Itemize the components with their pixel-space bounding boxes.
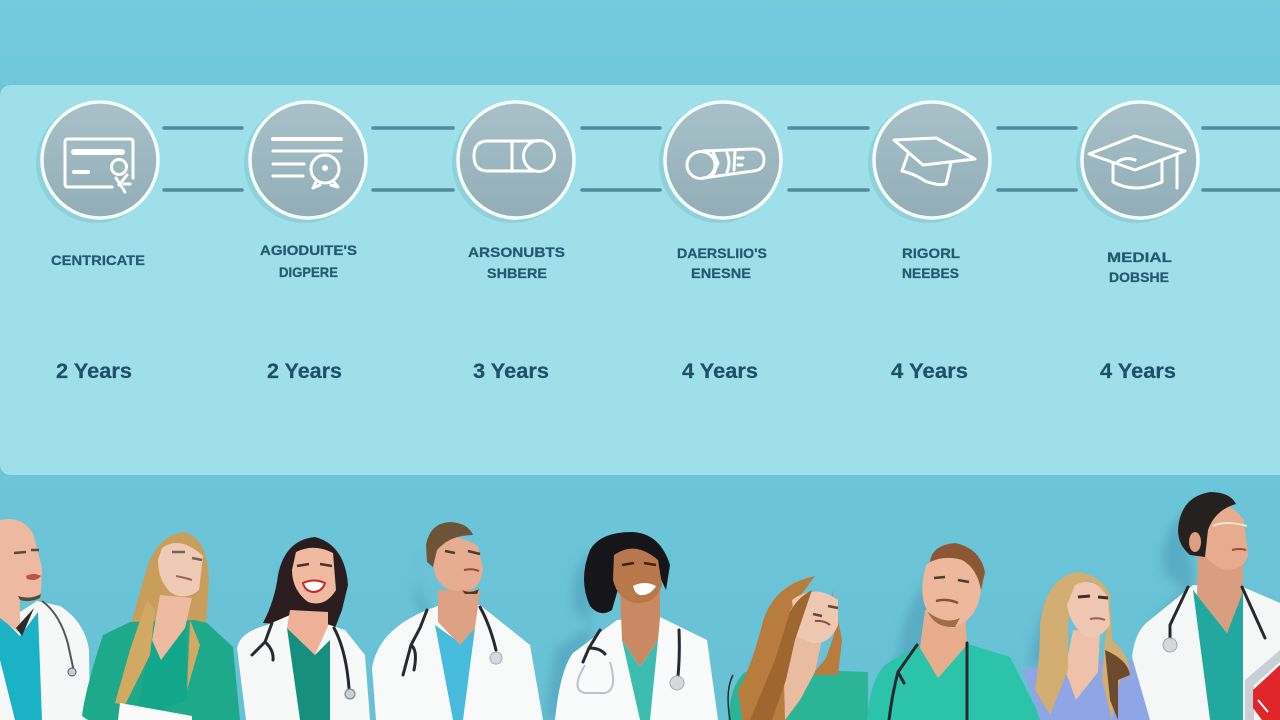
step 6: medical degree: DOBSHE — [1109, 269, 1169, 285]
duration: 2 years: 2 Years — [56, 360, 132, 383]
label: master's degree: RIGORL — [902, 245, 960, 261]
person: blonde nurse in blue scrubs — [1023, 572, 1175, 720]
label: associate's degree: ARSONUBTS — [468, 244, 565, 260]
step 1: certificate — [36, 102, 158, 383]
person: smiling doctor with short black hair — [555, 532, 718, 720]
person: auburn-haired nurse in green scrubs — [728, 576, 868, 720]
person: young male doctor in white coat — [372, 522, 543, 720]
step 4: bachelor's degree: ENESNE — [691, 265, 751, 281]
duration: 2 years: 2 Years — [267, 360, 342, 383]
icon: graduation cap — [1089, 136, 1185, 188]
lower wall background — [0, 475, 1280, 720]
icon: rolled diploma — [687, 149, 764, 178]
person: doctor with glasses holding a red folder — [1132, 492, 1280, 720]
step 4: bachelor's degree — [659, 102, 781, 383]
label: associate degree: AGIODUITE'S — [260, 242, 357, 258]
person: male nurse in teal scrubs — [867, 543, 1042, 720]
icon: rolled capsule — [474, 140, 554, 172]
label: certificate: CENTRICATE — [51, 252, 145, 268]
duration: 4 years: 4 Years — [1100, 360, 1176, 383]
step 6: medical degree — [1076, 102, 1198, 383]
wall shadows behind the staff — [415, 510, 1195, 720]
duration: 4 years: 4 Years — [682, 360, 758, 383]
step 5: master's degree — [868, 102, 990, 383]
top background band — [0, 0, 1280, 85]
person: dark-haired doctor in white coat — [237, 537, 370, 720]
icon: certificate card — [65, 139, 133, 192]
step 3: associate's degree: SHBERE — [487, 265, 547, 281]
step 2: associate degree — [244, 102, 366, 383]
panel: degree pathway — [0, 85, 1280, 475]
connector lines between steps — [164, 128, 1280, 190]
step 2: associate degree: DIGPERE — [279, 264, 338, 280]
person: blonde nurse in green scrubs — [82, 532, 240, 720]
label: bachelor's degree: DAERSLIIO'S — [677, 245, 767, 261]
step 5: master's degree: NEEBES — [902, 265, 959, 281]
duration: 4 years: 4 Years — [891, 360, 968, 383]
icon: diploma with seal — [273, 139, 341, 188]
label: medical degree: MEDIAL — [1107, 249, 1173, 265]
person: bald doctor in white coat — [0, 519, 90, 720]
step 3: associate's degree — [452, 102, 574, 383]
duration: 3 years: 3 Years — [473, 360, 549, 383]
icon: tilted mortarboard — [894, 138, 975, 185]
